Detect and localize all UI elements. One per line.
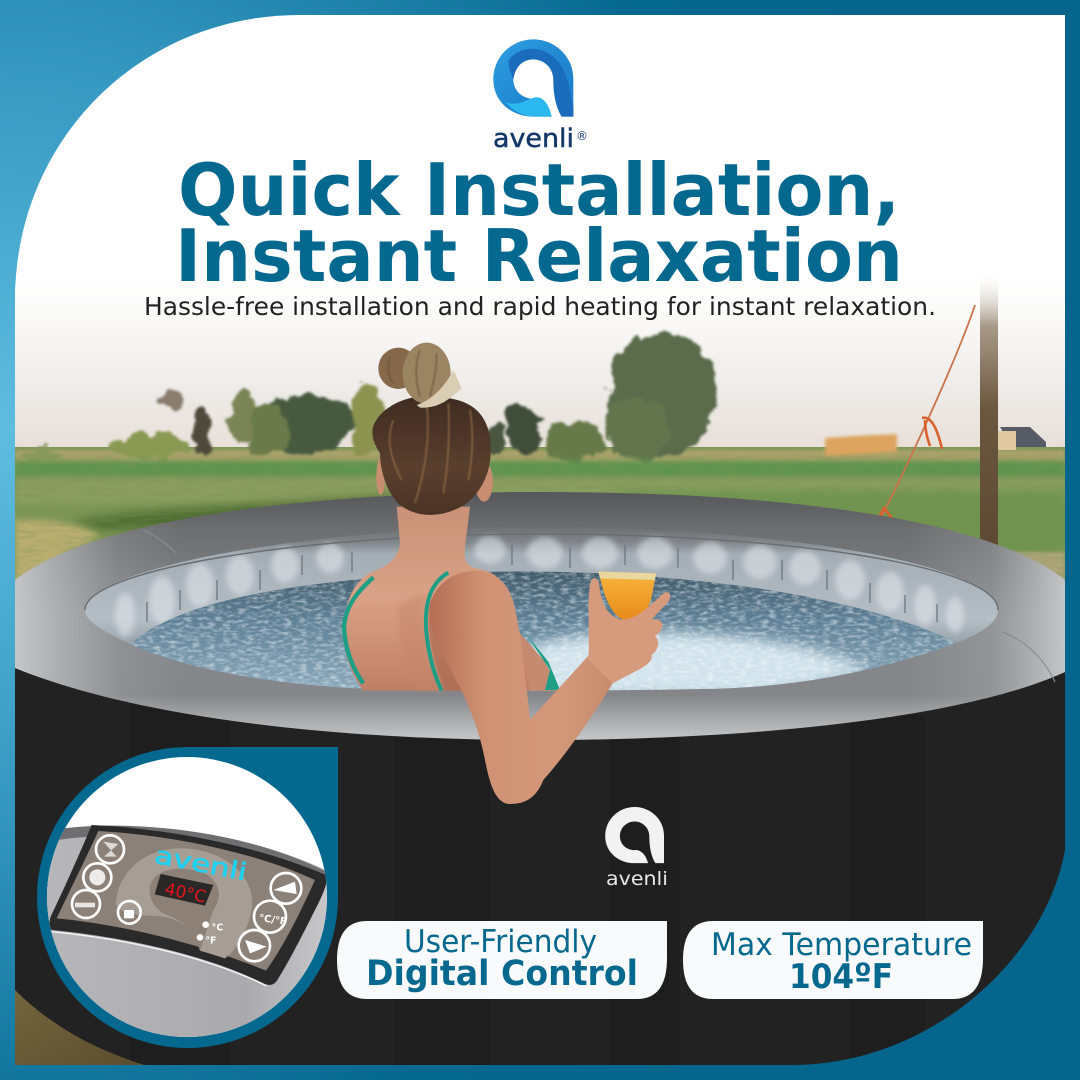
torso [343, 507, 560, 691]
logo text white: avenli [606, 868, 668, 890]
tub body [15, 660, 1065, 1065]
panel face [57, 831, 315, 971]
badge: max temperature [683, 921, 983, 999]
hair bun right [403, 343, 451, 404]
dirt right [1014, 550, 1065, 580]
display [155, 874, 213, 906]
tub panels [130, 1030, 925, 1065]
panel lighter shape [116, 848, 252, 958]
rope [881, 305, 975, 518]
ear left [376, 458, 385, 495]
logo [493, 39, 588, 154]
hand [588, 578, 670, 683]
hair [372, 397, 491, 515]
panel inner hollow [150, 869, 219, 951]
brand on panel: avenli [152, 841, 249, 886]
housing top band [57, 826, 327, 880]
hair bun left [378, 348, 418, 389]
dial white background [47, 757, 327, 1037]
teardrop border [37, 747, 338, 1048]
water [130, 572, 956, 691]
title line 1: Quick Installation, [178, 148, 900, 232]
unit F: °F [205, 935, 216, 946]
inner wall seams [147, 545, 937, 622]
bun streaks [388, 350, 437, 397]
distant trees [20, 333, 716, 462]
bikini left [344, 577, 373, 683]
bezel highlight [52, 932, 267, 986]
farmhouse wall [996, 431, 1016, 450]
wheat left [15, 520, 100, 585]
title [175, 148, 903, 298]
water base [130, 572, 956, 690]
crop band [15, 461, 1065, 477]
field bands [15, 455, 1065, 590]
arm [429, 571, 617, 804]
glass [598, 572, 656, 620]
tan strip [15, 450, 1065, 463]
housing [40, 827, 333, 1047]
glass rim [598, 572, 656, 580]
registered mark: ® [576, 129, 588, 143]
logo mark white [605, 807, 664, 863]
bezel [49, 825, 327, 985]
grass noise [15, 455, 1065, 580]
control panel picture [40, 825, 333, 1047]
farmhouse roof [1000, 427, 1046, 447]
olive band [15, 478, 1065, 504]
rim groove [85, 534, 998, 610]
badge: digital control [337, 921, 667, 999]
arm shadow [428, 606, 462, 691]
subtitle: Hassle-free installation and rapid heating for instant relaxation. [144, 292, 936, 321]
page white [15, 15, 1065, 295]
farmhouse [996, 427, 1046, 450]
dark left band [70, 490, 450, 530]
foam bright [520, 633, 870, 695]
side body [520, 633, 560, 691]
brand wordmark: avenli [493, 124, 574, 154]
field base [15, 447, 1065, 580]
badge shape [683, 921, 983, 999]
button labels: °C/°F [258, 913, 287, 928]
title line 2: Instant Relaxation [175, 214, 903, 298]
tub logo [605, 807, 668, 890]
badge shape [337, 921, 667, 999]
control panel inset [37, 747, 338, 1048]
woman [343, 343, 670, 804]
scrunchie [417, 370, 462, 408]
sky [15, 280, 1065, 450]
badge line 1: Max Temperature [711, 927, 972, 963]
hair highlights [390, 403, 472, 503]
hay bale [825, 434, 897, 456]
rim seams [143, 530, 1055, 682]
wooden post [980, 270, 998, 548]
badge line 2: 104ºF [789, 957, 893, 997]
inner wall tufts [115, 536, 964, 637]
back shading [399, 596, 440, 692]
display text: 40°C [163, 879, 208, 907]
tub rim [15, 492, 1065, 740]
badge line 2: Digital Control [366, 954, 638, 994]
unit C: °C [212, 923, 223, 934]
ground [15, 990, 144, 1065]
rim side highlight [15, 527, 1065, 703]
button glyphs [75, 842, 297, 953]
logo highlight [505, 97, 552, 117]
inner wall [85, 532, 998, 644]
rope knot [875, 418, 942, 525]
bikini strap [426, 573, 448, 691]
logo dark fold [508, 49, 573, 117]
foam texture [130, 572, 956, 690]
green right [600, 490, 1065, 555]
bikini right [525, 633, 560, 690]
badge line 1: User-Friendly [404, 924, 597, 960]
buttons [72, 835, 301, 961]
logo mark [493, 39, 573, 117]
ear right [475, 462, 493, 502]
